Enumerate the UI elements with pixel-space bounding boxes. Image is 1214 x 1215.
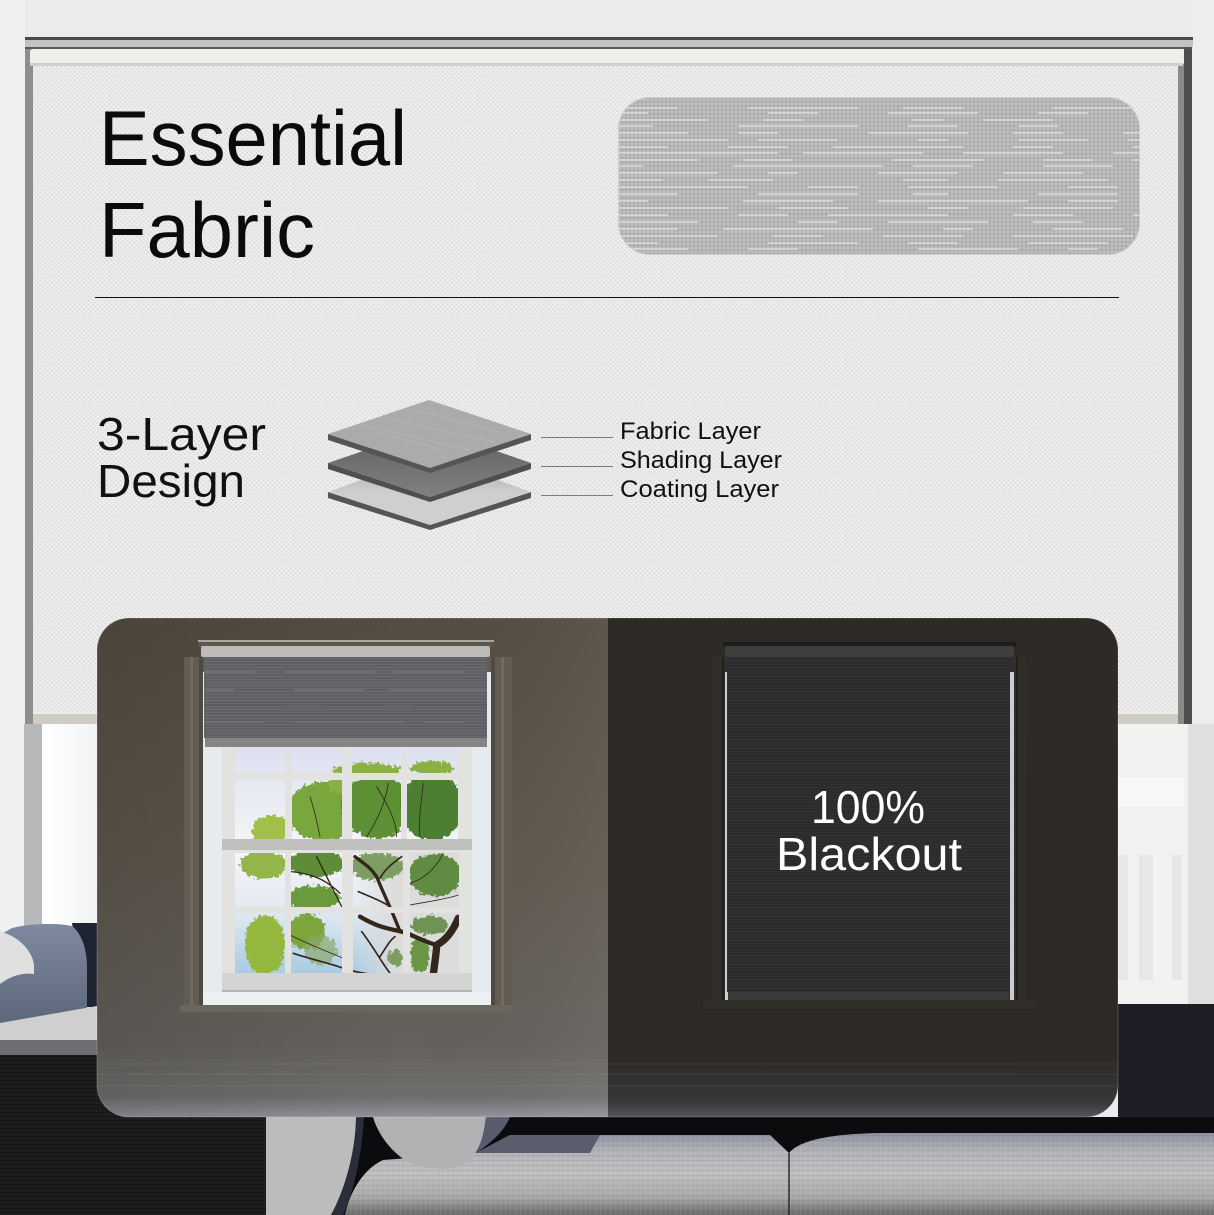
left window: [180, 640, 513, 1012]
label: fabric layer: Fabric Layer: [620, 418, 761, 445]
seat cushions: [345, 1133, 1214, 1215]
3-layer heading: 3-Layer: [97, 408, 266, 460]
casing: [712, 657, 1026, 1000]
bottom bar: [728, 992, 1009, 1000]
armrest: [266, 1117, 356, 1215]
fabric swatch: [618, 97, 1140, 255]
sofa back left: [0, 923, 266, 1215]
sill: [703, 1000, 1037, 1009]
shading layer: [328, 428, 531, 502]
cassette: [30, 49, 1183, 66]
comparison panel: [97, 618, 1118, 1117]
right window: [722, 642, 1018, 1000]
coating layer: [328, 455, 531, 530]
3-layer heading: Design: [97, 455, 245, 507]
branches: [290, 783, 458, 975]
caption: [780, 790, 962, 870]
caption: 100%: [811, 781, 925, 833]
side channel right: [1178, 40, 1192, 724]
caption: Blackout: [776, 828, 962, 880]
right half: dark room: [608, 618, 1118, 1117]
bottom bar: [33, 712, 1178, 724]
layer stack icon: [328, 400, 531, 530]
leader lines: [541, 437, 613, 496]
title: [99, 94, 407, 274]
view through window: [235, 747, 463, 975]
sofa: [0, 923, 1214, 1215]
headrail: [25, 37, 1193, 49]
layer labels: [541, 418, 782, 503]
3-layer heading: [97, 408, 266, 507]
pillow: [373, 1117, 486, 1169]
reveal: [203, 672, 491, 1005]
side channel left: [25, 40, 33, 724]
panel edge: [97, 618, 1118, 1117]
sofa back right: [790, 1004, 1214, 1140]
light slits: [725, 672, 1014, 1000]
roller blind: [25, 37, 1193, 724]
divider: [95, 297, 1119, 298]
label: coating layer: Coating Layer: [620, 476, 779, 503]
title: Essential: [99, 94, 407, 182]
sash frame: [222, 745, 472, 992]
headrail: [723, 642, 1016, 657]
shade: [727, 657, 1010, 992]
skirting detail: [97, 1063, 1118, 1087]
casing: [184, 657, 512, 1005]
label: shading layer: Shading Layer: [620, 447, 782, 474]
fabric: [33, 66, 1178, 713]
fabric layer: [328, 400, 531, 473]
headrail: [198, 640, 494, 657]
title: Fabric: [99, 186, 315, 274]
raised grey shade: [204, 657, 487, 747]
foliage: [240, 761, 463, 975]
left half: open room: [97, 618, 608, 1117]
sill: [180, 1005, 365, 1012]
